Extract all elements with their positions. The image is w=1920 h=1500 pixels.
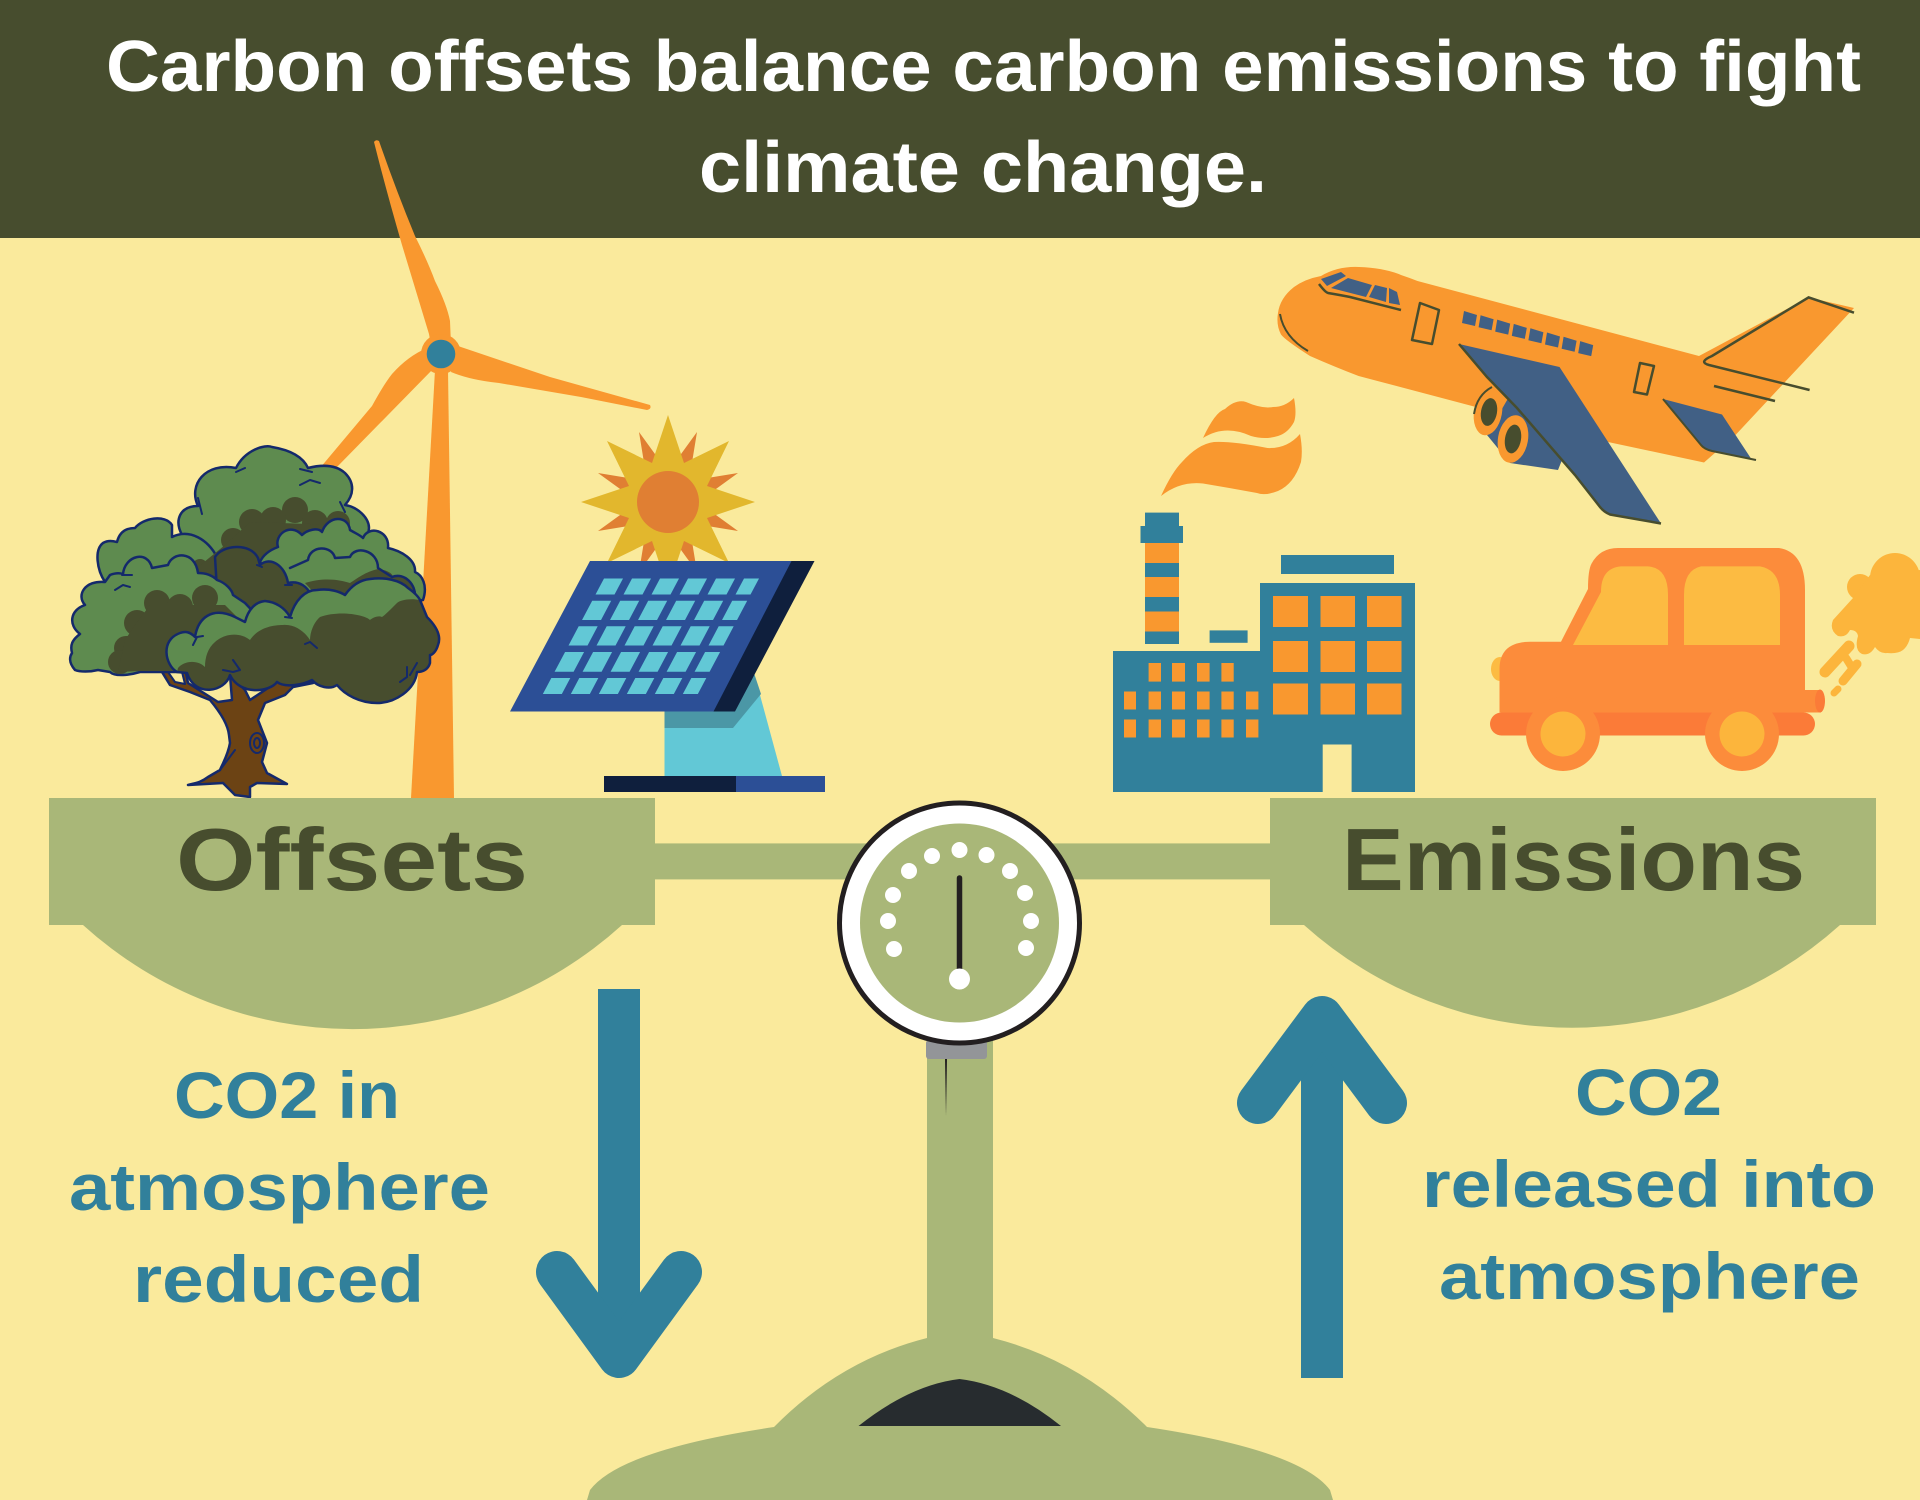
cockpit line: [1319, 284, 1401, 310]
text: CO2 reduced: [69, 1058, 490, 1316]
car bumper: [1490, 712, 1815, 736]
solar panel: [510, 561, 825, 792]
text: CO2 reduced: atmosphere: [69, 1150, 490, 1224]
arrow: down: [557, 989, 681, 1357]
car wheels: [1526, 697, 1779, 771]
tree: [70, 446, 439, 797]
scale beam: [655, 843, 1270, 879]
header band: [0, 0, 1920, 238]
panel cells: [543, 578, 759, 694]
text: CO2 released: atmosphere: [1439, 1239, 1860, 1313]
plane engines: [1470, 386, 1570, 470]
offsets label: Offsets: [176, 810, 528, 909]
car headlight: [1491, 657, 1509, 681]
scale column: [927, 1040, 993, 1340]
title: [106, 27, 1861, 208]
factory building: [1113, 583, 1415, 792]
car exhaust pipe: [1800, 690, 1825, 712]
stand base: [604, 776, 825, 792]
turbine blades: [320, 140, 651, 468]
roof bar: [1281, 555, 1394, 574]
front canopy fill: [166, 578, 439, 703]
text: CO2 released: CO2: [1575, 1055, 1722, 1129]
stand shadow: [664, 673, 761, 728]
arrow: up: [1258, 1017, 1386, 1378]
car windows: [1573, 566, 1780, 645]
vent: [1210, 630, 1248, 643]
right cluster shadow: [305, 569, 415, 610]
text: CO2 released: [1422, 1055, 1876, 1313]
airplane: [1277, 267, 1854, 524]
scale base: [587, 1338, 1333, 1500]
gauge needle: [949, 878, 970, 990]
main wing edge: [1459, 344, 1661, 524]
text: CO2 released: released into: [1422, 1147, 1876, 1221]
factory windows: [1124, 596, 1402, 738]
plane fuselage: [1277, 267, 1854, 462]
car body: [1500, 548, 1805, 712]
nose line: [1280, 314, 1308, 351]
sun back rays: [598, 432, 738, 572]
crown shadow: [192, 497, 350, 610]
plane cockpit windows: [1321, 272, 1400, 305]
tail lines: [1704, 297, 1854, 401]
left pan: [49, 798, 655, 1029]
base mound: [587, 1338, 1333, 1500]
right cluster: [260, 519, 425, 620]
plane rear door: [1634, 363, 1654, 394]
canopy detail lines: [115, 468, 417, 682]
plane rear wing: [1663, 399, 1752, 460]
panel face: [510, 561, 792, 712]
factory: [1113, 513, 1415, 792]
panel stand: [664, 673, 782, 776]
front canopy outline: [166, 578, 439, 703]
gauge: [840, 803, 1080, 1043]
turbine hub: [421, 334, 461, 374]
sun: [581, 415, 755, 589]
sun disc: [637, 471, 699, 533]
back left cluster: [97, 518, 240, 620]
title: Carbon offsets balance carbon emissions to fight: [106, 27, 1861, 107]
plane main wing: [1459, 344, 1661, 524]
rear wing edge: [1663, 399, 1756, 460]
left cluster shadow: [108, 585, 260, 674]
car: [1490, 548, 1920, 771]
right cluster lines: [290, 548, 415, 597]
sun front rays: [581, 415, 755, 589]
gauge connector: [926, 1040, 987, 1116]
plane windows: [1462, 311, 1593, 356]
wind turbine: [320, 140, 651, 798]
tree trunk: [162, 668, 313, 797]
tree canopy: [70, 446, 439, 703]
gauge dots: [880, 842, 1039, 957]
text: CO2 reduced: reduced: [133, 1242, 424, 1316]
back crown: [179, 446, 369, 600]
right pan: [1270, 798, 1876, 1028]
left front cluster: [70, 555, 280, 675]
chimney: [1140, 513, 1183, 644]
factory smoke: [1161, 398, 1302, 496]
center dark cluster: [215, 547, 310, 640]
text: CO2 reduced: CO2 in: [174, 1058, 400, 1132]
emissions label: Emissions: [1342, 810, 1805, 909]
plane front door: [1412, 303, 1439, 344]
front canopy highlight: [166, 578, 420, 672]
panel edge: [714, 561, 814, 712]
base dome: [858, 1379, 1061, 1426]
title: climate change.: [699, 128, 1267, 208]
turbine tower: [411, 370, 454, 798]
car exhaust cloud: [1825, 553, 1920, 693]
